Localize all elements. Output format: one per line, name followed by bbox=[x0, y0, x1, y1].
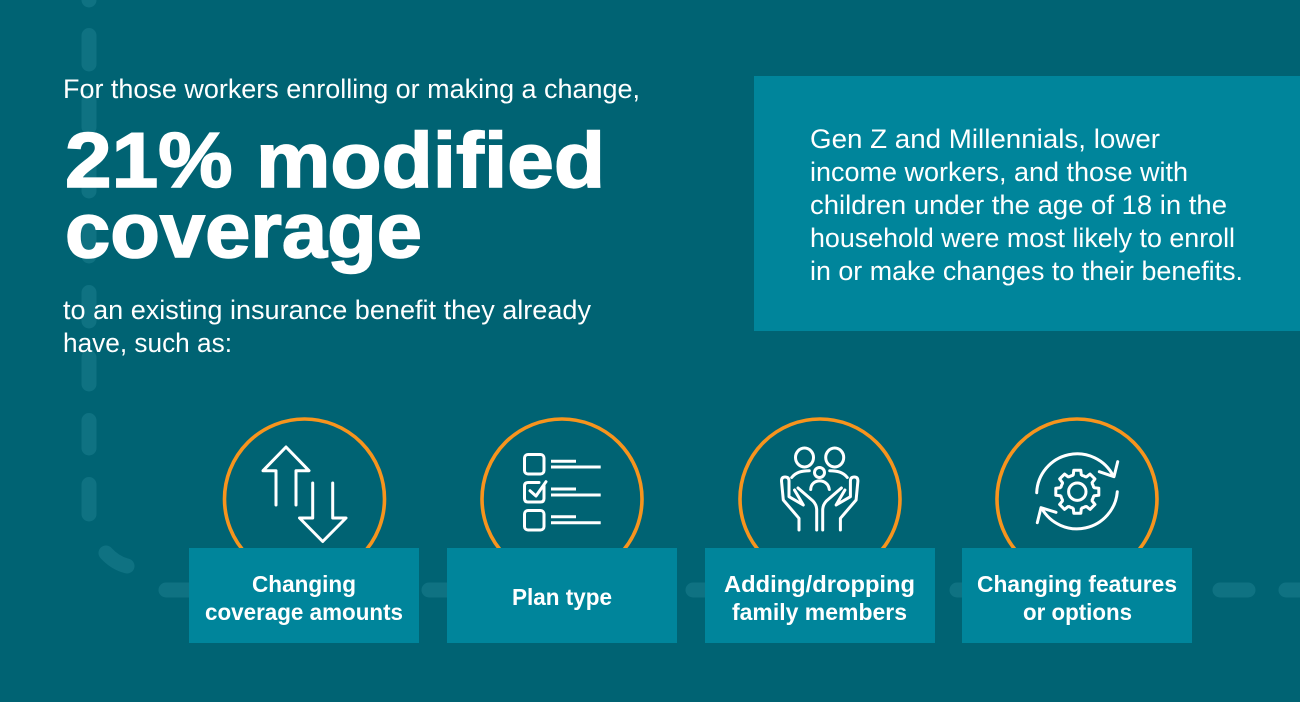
panel: Gen Z and Millennials callout: household were most likely to enroll bbox=[810, 223, 1235, 253]
item: adding or dropping family members bbox=[705, 419, 935, 643]
item: adding or dropping family members: family members bbox=[732, 599, 907, 625]
headline: 21% modified coverage bbox=[65, 116, 605, 274]
intro text: For those workers enrolling or making a change, bbox=[63, 74, 640, 104]
panel: Gen Z and Millennials callout bbox=[754, 76, 1300, 331]
item: changing features or options: or options bbox=[1023, 599, 1132, 625]
icon: family in hands bbox=[782, 448, 858, 530]
item: adding or dropping family members: Adding/dropping bbox=[724, 571, 915, 597]
icon: gear with circular arrows bbox=[1037, 454, 1118, 529]
supporting text: to an existing insurance benefit they already bbox=[63, 295, 591, 325]
panel: Gen Z and Millennials callout: income workers, and those with bbox=[810, 157, 1188, 187]
headline: 21% modified coverage: 21% modified bbox=[65, 116, 605, 204]
panel: Gen Z and Millennials callout: children under the age of 18 in the bbox=[810, 190, 1227, 220]
item: changing features or options: Changing features bbox=[977, 571, 1177, 597]
item: changing coverage amounts: coverage amounts bbox=[205, 599, 403, 625]
item: changing coverage amounts bbox=[189, 419, 419, 643]
icon: up and down arrows bbox=[263, 447, 346, 542]
item: changing coverage amounts: Changing bbox=[252, 571, 356, 597]
panel: Gen Z and Millennials callout: Gen Z and Millennials, lower bbox=[810, 124, 1160, 154]
item: plan type bbox=[447, 419, 677, 643]
item: changing features or options bbox=[962, 419, 1192, 643]
icon: checklist bbox=[524, 454, 601, 530]
headline: 21% modified coverage: coverage bbox=[65, 186, 422, 274]
item: plan type: Plan type bbox=[512, 584, 612, 610]
supporting text bbox=[63, 295, 591, 358]
supporting text: have, such as: bbox=[63, 328, 232, 358]
panel: Gen Z and Millennials callout: in or make changes to their benefits. bbox=[810, 256, 1243, 286]
